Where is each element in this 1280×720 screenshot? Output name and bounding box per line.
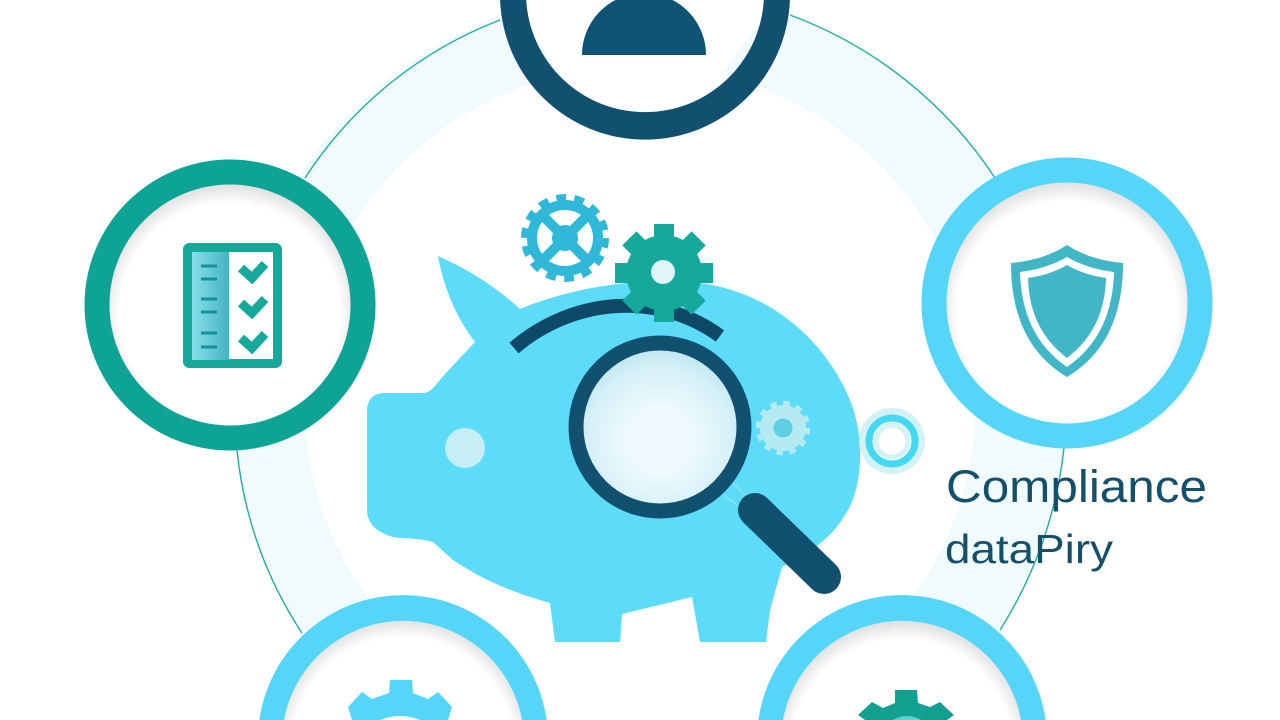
label text: Compliance (946, 461, 1207, 512)
handle (755, 510, 824, 577)
outlined blue gear (526, 198, 604, 278)
pig eye (445, 428, 485, 468)
magnifying glass (576, 343, 824, 577)
piggy bank (367, 256, 860, 642)
icon: blue gear (348, 680, 452, 720)
background ring band (235, 10, 1066, 640)
icon: checklist (188, 248, 278, 364)
small ring (859, 408, 925, 474)
icon: teal gear (858, 690, 954, 720)
thin outline ring (237, 15, 1064, 633)
neck (724, 483, 745, 505)
lens and rim (576, 343, 744, 511)
bottom left circle: gear (259, 595, 547, 720)
right circle: shield (934, 170, 1200, 436)
top circle: user (500, 0, 790, 140)
left circle: checklist (97, 172, 363, 438)
solid teal gear (615, 224, 713, 322)
icon: shield (1011, 245, 1123, 377)
small pale gear on pig (758, 403, 808, 453)
label text: dataPiry (945, 526, 1114, 572)
bottom right circle: gear (758, 595, 1046, 720)
icon: person (582, 0, 706, 55)
label text (945, 461, 1207, 572)
dark arc on pig back (514, 306, 720, 348)
